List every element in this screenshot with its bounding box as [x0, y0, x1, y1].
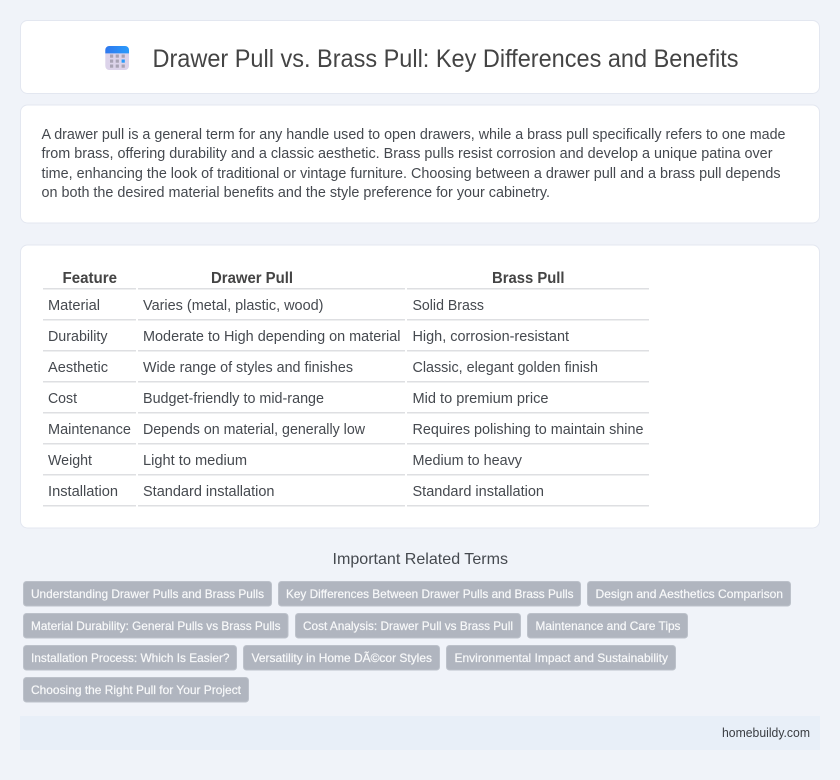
tag: Material Durability: General Pulls vs Brass Pulls	[31, 619, 280, 633]
tag: Maintenance and Care Tips	[536, 619, 680, 633]
table row: installation: Standard installation	[143, 484, 274, 500]
tag: Key Differences Between Drawer Pulls and Brass Pulls	[286, 587, 574, 601]
table header row	[43, 270, 649, 290]
tag: Understanding Drawer Pulls and Brass Pulls	[31, 587, 264, 601]
table header row: Brass Pull	[492, 270, 564, 287]
table row: installation	[43, 484, 649, 506]
table row: aesthetic	[43, 360, 649, 382]
text block: introduction: A drawer pull is a general term for any handle used to open drawers, while a brass pull specifically refers to one made	[42, 127, 786, 143]
table row: installation: Standard installation	[412, 484, 544, 500]
tag	[446, 646, 676, 670]
table row: weight: Light to medium	[143, 453, 247, 469]
text block: introduction: time, enhancing the look of traditional or vintage furniture. Choosing between a drawer pull and a brass pull depends	[42, 166, 780, 182]
table row: cost	[43, 391, 649, 414]
icon: calendar	[105, 46, 129, 70]
panel: comparison table	[20, 245, 820, 528]
tag: Environmental Impact and Sustainability	[454, 651, 668, 665]
text block: introduction	[42, 127, 786, 201]
table row: maintenance: Depends on material, generally low	[143, 422, 366, 438]
tag	[244, 646, 440, 670]
tag	[24, 646, 236, 670]
table row: durability: Durability	[48, 329, 108, 345]
table row: cost: Cost	[48, 391, 77, 407]
table row: material	[43, 298, 649, 320]
table row: material: Solid Brass	[412, 298, 484, 314]
table row: maintenance: Maintenance	[48, 422, 131, 438]
tag: Installation Process: Which Is Easier?	[31, 651, 230, 665]
panel: introduction	[20, 105, 820, 223]
table row: maintenance: Requires polishing to maintain shine	[412, 422, 644, 438]
text block: introduction: on both the desired material benefits and the style preference for your cabinetry.	[42, 185, 550, 201]
table row: maintenance	[43, 422, 649, 444]
tag: Design and Aesthetics Comparison	[596, 587, 783, 601]
tag	[278, 582, 580, 606]
table row: material: Material	[48, 298, 100, 314]
table header row: Feature	[62, 270, 117, 287]
footer	[20, 716, 820, 750]
heading: related terms: Important Related Terms	[332, 551, 508, 568]
table row: aesthetic: Wide range of styles and finishes	[143, 360, 353, 376]
text block: introduction: from brass, offering durability and a classic aesthetic. Brass pulls resist corrosion and develop a unique patina over	[42, 146, 773, 162]
table row: cost: Mid to premium price	[412, 391, 548, 407]
title: Drawer Pull vs. Brass Pull: Key Differences and Benefits	[152, 45, 738, 73]
table row: installation: Installation	[48, 484, 118, 500]
table row: durability: Moderate to High depending on material	[143, 329, 400, 345]
table row: material: Varies (metal, plastic, wood)	[143, 298, 324, 314]
table row: weight	[43, 453, 649, 476]
tag: Cost Analysis: Drawer Pull vs Brass Pull	[303, 619, 513, 633]
tag	[24, 582, 272, 606]
table row: weight: Medium to heavy	[412, 453, 523, 469]
tag: Versatility in Home DÃ©cor Styles	[252, 651, 432, 665]
table row: aesthetic: Classic, elegant golden finish	[412, 360, 598, 376]
tag	[296, 614, 520, 638]
tag	[24, 614, 288, 638]
table row: aesthetic: Aesthetic	[48, 360, 108, 376]
tag	[24, 678, 248, 702]
tag: Choosing the Right Pull for Your Project	[31, 683, 242, 697]
table row: weight: Weight	[48, 453, 92, 469]
table row: durability: High, corrosion-resistant	[412, 329, 569, 345]
table row: cost: Budget-friendly to mid-range	[143, 391, 324, 407]
tag	[528, 614, 688, 638]
footer source: homebuildy.com	[722, 726, 810, 740]
tag list: related terms	[24, 582, 790, 702]
table row: durability	[43, 329, 649, 352]
tag	[588, 582, 790, 606]
panel: header	[20, 20, 820, 94]
table header row: Drawer Pull	[211, 270, 293, 287]
